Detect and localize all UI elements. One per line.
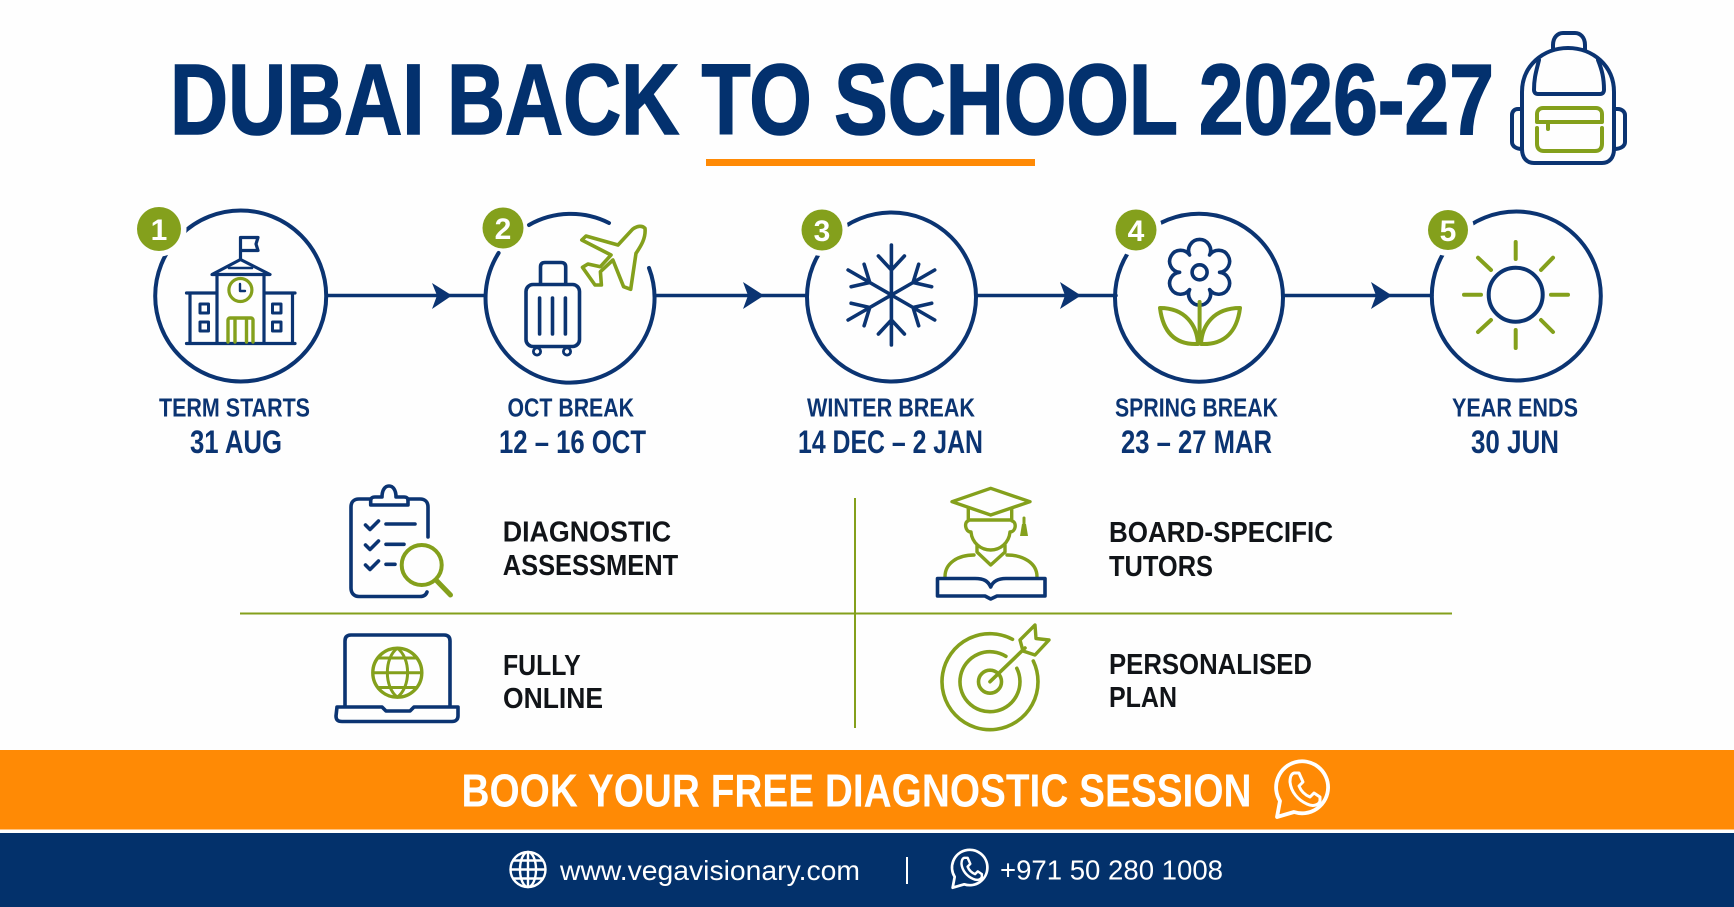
step 1 label: TERM STARTS (159, 394, 310, 422)
arrow 4 (1371, 282, 1392, 309)
step 5 badge: 5 (1440, 215, 1456, 248)
step 4 date: 23 – 27 MAR (1121, 424, 1272, 460)
step 4 badge (1110, 204, 1162, 256)
step 2 badge (482, 208, 524, 248)
phone number: +971 50 280 1008 (1000, 854, 1223, 886)
text: personalised plan: PERSONALISED (1109, 649, 1312, 681)
step 3: winter break (796, 204, 983, 460)
text: diagnostic assessment (503, 516, 678, 582)
feature: fully online (336, 635, 603, 722)
icon: snowflake (842, 245, 941, 345)
step 1 badge: 1 (151, 214, 167, 247)
step 1 ring (155, 210, 326, 382)
icon: globe (510, 852, 546, 887)
step 5 date: 30 JUN (1471, 424, 1559, 460)
step 1 badge (132, 202, 186, 256)
text: fully online: FULLY (503, 650, 581, 682)
step 5 badge (1422, 204, 1474, 256)
text: board-specific tutors (1109, 517, 1333, 583)
step 2: oct break (482, 208, 655, 460)
text: personalised plan: PLAN (1109, 682, 1177, 714)
text: fully online (503, 650, 603, 715)
arrow 3 (1060, 282, 1081, 309)
arrow 2 (743, 282, 764, 309)
step 1 date: 31 AUG (190, 424, 282, 460)
timeline connector lines (327, 294, 1432, 297)
step 3 badge (796, 204, 848, 256)
step 5 ring (1432, 212, 1601, 380)
step 4 label: SPRING BREAK (1115, 394, 1278, 422)
icon: sun (1464, 242, 1568, 348)
feature: personalised plan (942, 625, 1312, 730)
divider (906, 857, 908, 884)
step 3 badge: 3 (814, 215, 830, 248)
step 5 label: YEAR ENDS (1452, 394, 1578, 422)
step 1: term starts (132, 202, 326, 460)
icon: target with arrow (942, 625, 1049, 730)
text: diagnostic assessment: ASSESSMENT (503, 550, 678, 582)
text: board-specific tutors: TUTORS (1109, 551, 1213, 583)
text: fully online: ONLINE (503, 683, 603, 715)
text: diagnostic assessment: DIAGNOSTIC (503, 516, 671, 548)
step 3 date: 14 DEC – 2 JAN (798, 424, 983, 460)
icon: laptop with globe (336, 635, 458, 722)
step 2 date: 12 – 16 OCT (499, 424, 646, 460)
icon: whatsapp (1276, 761, 1328, 817)
icon: clipboard with magnifier (351, 486, 450, 596)
step 4 badge: 4 (1128, 215, 1145, 248)
text: board-specific tutors: BOARD-SPECIFIC (1109, 517, 1333, 549)
step 3 label: WINTER BREAK (807, 394, 975, 422)
icon: backpack (1512, 33, 1625, 163)
icon: graduate with book (938, 488, 1045, 599)
banner text: BOOK YOUR FREE DIAGNOSTIC SESSION (462, 764, 1252, 816)
icon: school building (186, 238, 295, 344)
call to action banner (0, 750, 1734, 830)
title underline (706, 159, 1035, 166)
icon: airplane (582, 226, 645, 289)
step 2 label: OCT BREAK (508, 394, 634, 422)
icon: flower (1160, 239, 1240, 344)
step 3 ring (807, 212, 976, 382)
step 2 ring (486, 214, 655, 383)
icon: whatsapp small (952, 850, 987, 888)
footer contact bar (0, 833, 1734, 907)
step 4: spring break (1110, 204, 1283, 460)
feature: board-specific tutors (938, 488, 1333, 599)
text: personalised plan (1109, 649, 1312, 714)
step 4 ring (1115, 214, 1283, 382)
arrow 1 (432, 283, 452, 309)
feature: diagnostic assessment (351, 486, 678, 596)
step 5: year ends (1422, 204, 1601, 460)
icon: suitcase (526, 262, 580, 355)
website address: www.vegavisionary.com (559, 855, 860, 886)
step 2 badge: 2 (495, 213, 511, 246)
